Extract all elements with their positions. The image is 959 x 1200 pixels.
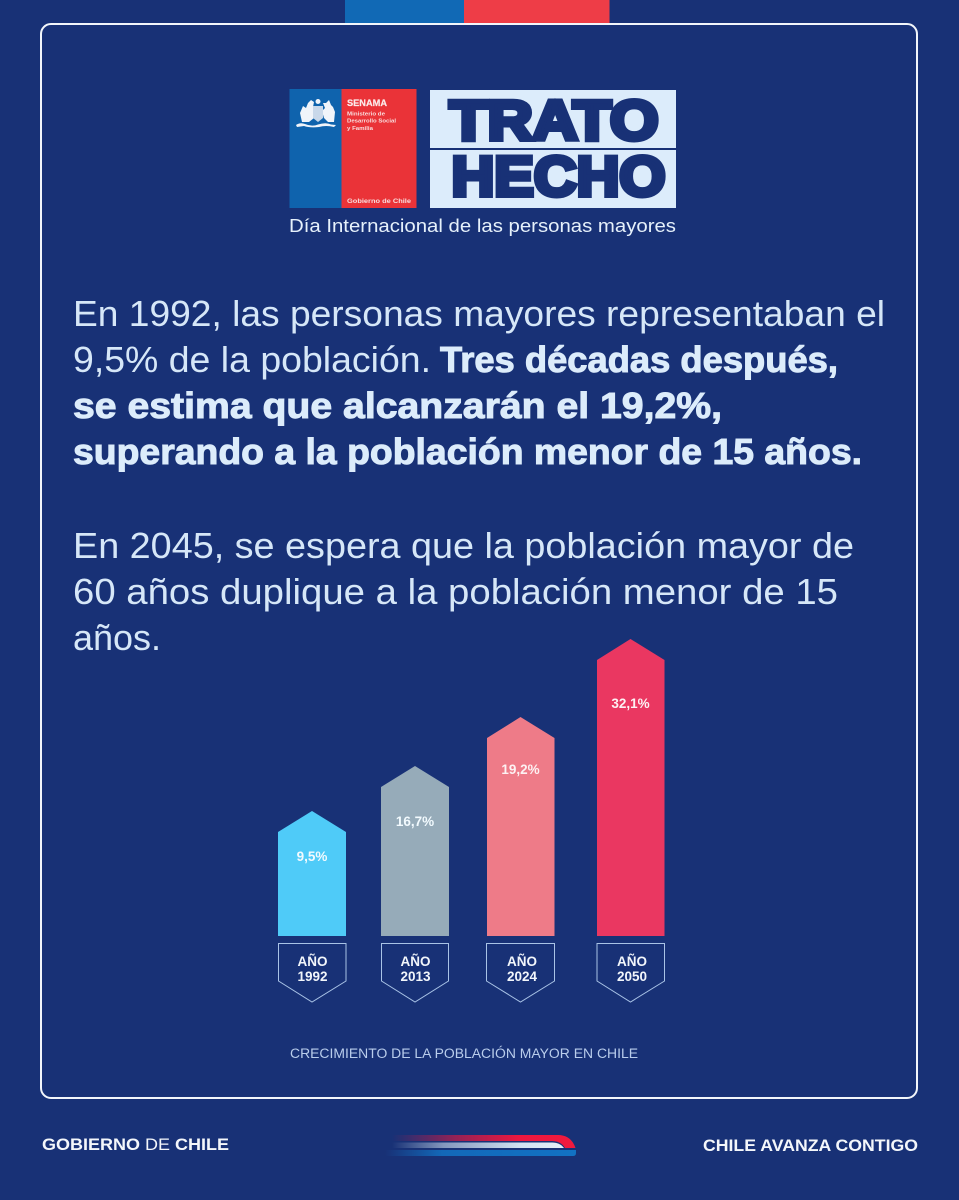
logo: Trato Hecho xyxy=(430,88,676,208)
bar: 2013 xyxy=(381,766,449,936)
label: 2024: AÑO xyxy=(507,954,537,969)
bar: 2050 xyxy=(597,639,664,936)
text block: 1992 paragraph xyxy=(73,293,885,472)
bar: 2024 xyxy=(487,717,554,936)
text block: 2045 paragraph: 60 años duplique a la población menor de 15 xyxy=(73,571,838,612)
label: 2013: AÑO xyxy=(400,954,430,969)
footer: Chile avanza contigo: CHILE AVANZA CONTIGO xyxy=(703,1136,918,1155)
text block: 1992 paragraph: En 1992, las personas mayores representaban el xyxy=(73,293,885,334)
label: 2050: 2050 xyxy=(617,969,647,984)
footer: swoosh logo xyxy=(385,1135,576,1156)
bar: 2013: 16,7% xyxy=(396,814,434,829)
label: 2024 xyxy=(486,944,554,1002)
label: 2013 xyxy=(382,944,448,1002)
text block: 1992 paragraph: 9,5% de la población. xyxy=(73,339,431,380)
text block: 2045 paragraph xyxy=(73,525,854,658)
label: 1992: AÑO xyxy=(298,954,328,969)
label: 2050: AÑO xyxy=(617,954,647,969)
icon: coat of arms xyxy=(296,99,336,127)
footer: Gobierno de Chile: GOBIERNO DE CHILE xyxy=(42,1135,229,1154)
bar chart xyxy=(278,639,664,1002)
Hecho wordmark: HECHO xyxy=(452,144,666,208)
logo text: ministry: y Familia xyxy=(347,126,374,132)
logo text: Gobierno de Chile: Gobierno de Chile xyxy=(347,198,411,205)
logo text: ministry xyxy=(347,112,397,132)
label: 2024: 2024 xyxy=(507,969,538,984)
top flag stripe xyxy=(345,0,610,23)
text block: 1992 paragraph: Tres décadas después, xyxy=(440,339,838,380)
logo text: SENAMA: SENAMA xyxy=(347,98,387,108)
bar: 1992: 9,5% xyxy=(297,849,327,864)
Trato wordmark: TRATO xyxy=(450,88,658,152)
text block: 1992 paragraph: se estima que alcanzarán el 19,2%, xyxy=(73,385,722,426)
text block: 1992 paragraph: superando a la población menor de 15 años. xyxy=(73,431,862,472)
text block: 2045 paragraph: En 2045, se espera que la población mayor de xyxy=(73,525,854,566)
logo text: ministry: Ministerio de xyxy=(347,112,385,118)
logo: SENAMA xyxy=(290,89,416,208)
text block: 2045 paragraph: años. xyxy=(73,617,161,658)
bar: 2024: 19,2% xyxy=(501,762,540,777)
bar: 2050: 32,1% xyxy=(611,696,650,711)
logo text: ministry: Desarrollo Social xyxy=(347,118,397,124)
chart caption: CRECIMIENTO DE LA POBLACIÓN MAYOR EN CHILE xyxy=(290,1046,638,1061)
label: 1992: 1992 xyxy=(297,969,328,984)
label: 2050 xyxy=(597,944,664,1002)
bar: 1992 xyxy=(278,811,346,936)
label: 1992 xyxy=(278,944,346,1002)
label: 2013: 2013 xyxy=(400,969,431,984)
subtitle: Día Internacional de las personas mayores xyxy=(289,215,676,236)
